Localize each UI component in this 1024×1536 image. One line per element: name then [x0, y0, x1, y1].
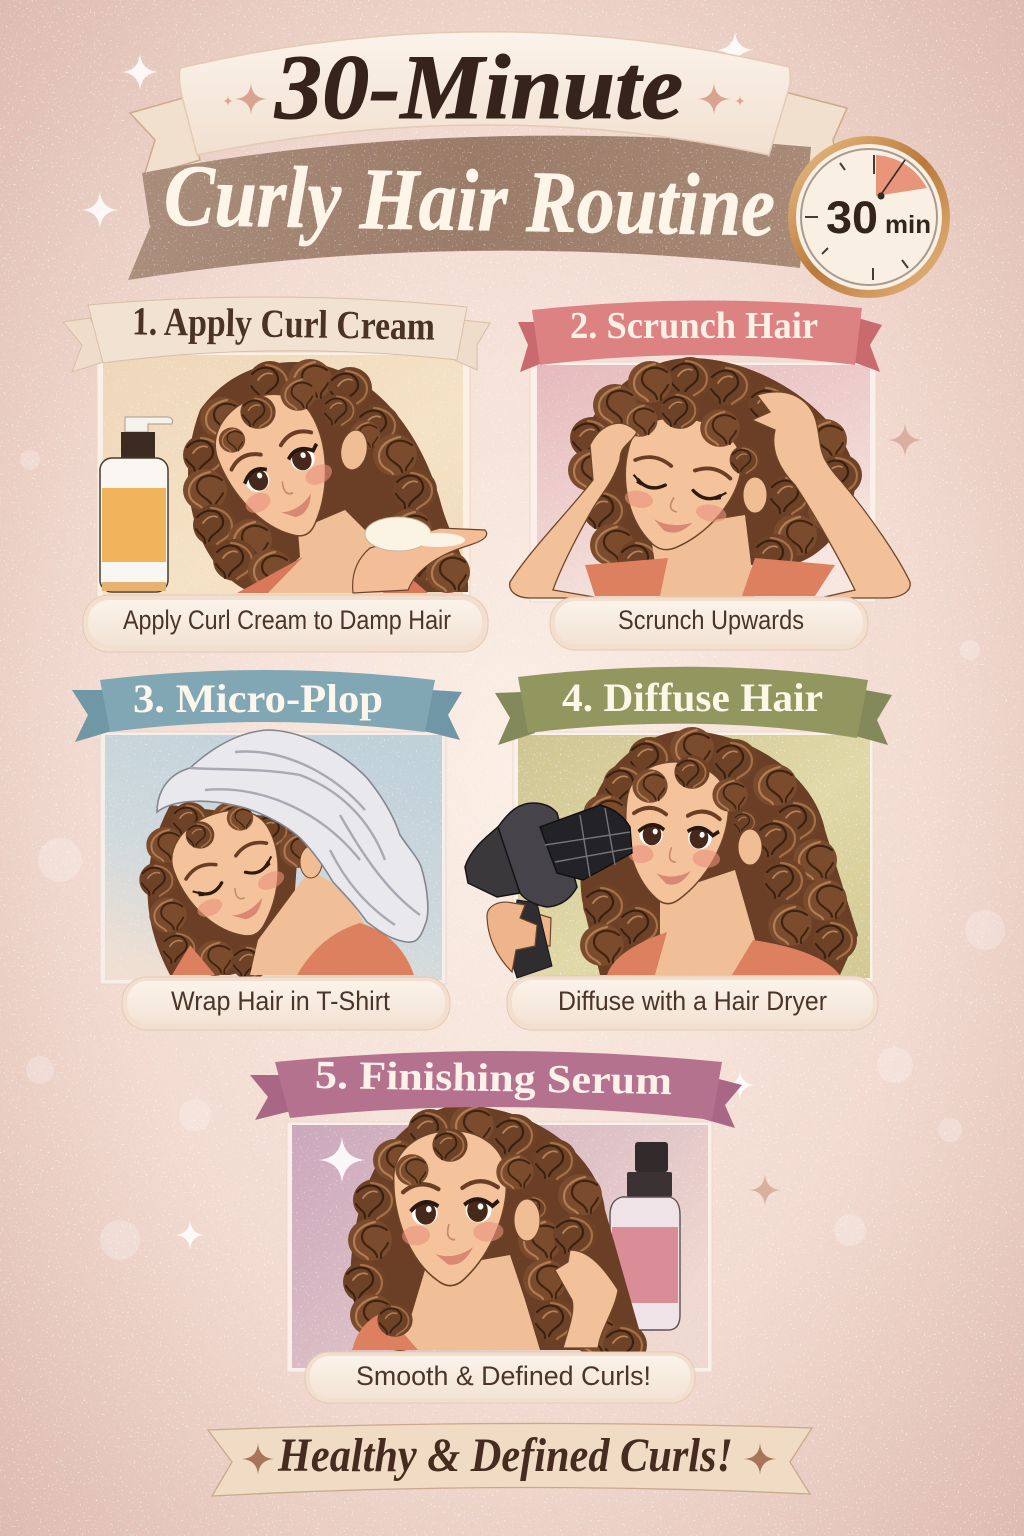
caption: step 3 [122, 977, 450, 1030]
towel [157, 730, 428, 942]
panel: step 1 apply curl cream [97, 352, 487, 602]
ribbon tails [130, 92, 847, 176]
panel: step 3 micro-plop [100, 730, 446, 984]
brown ribbon [128, 136, 811, 280]
character: woman scrunching hair [510, 357, 910, 598]
ear [338, 428, 370, 472]
footer text: Healthy & Defined Curls! [277, 1429, 733, 1482]
panel: step 2 scrunch hair [510, 357, 910, 602]
caption: step 2: Scrunch Upwards [618, 605, 804, 635]
character: woman diffusing hair [580, 727, 858, 975]
panel: step 4 diffuse hair [465, 727, 873, 982]
icon: 30 minute timer: min [885, 211, 931, 239]
ribbon: step 2 heading [518, 300, 882, 372]
neck and shirt [250, 870, 365, 975]
hand [555, 1250, 618, 1348]
neck and shirt [650, 515, 755, 597]
caption: step 1 [83, 595, 488, 652]
title banner [120, 32, 847, 285]
ribbon: step 2 heading: 2. Scrunch Hair [570, 305, 818, 347]
neck and shirt [395, 1255, 540, 1350]
ear [743, 477, 767, 513]
ribbon: step 3 heading: 3. Micro-Plop [133, 676, 383, 721]
cream ribbon [179, 32, 790, 155]
caption: step 2 [550, 597, 868, 650]
ribbon: step 5 heading [250, 1051, 742, 1128]
character: woman with shiny curls [343, 1104, 647, 1366]
ear [300, 846, 322, 878]
ribbon tails [72, 690, 462, 742]
icon: 30 minute timer [788, 136, 950, 298]
arms and hands [510, 392, 910, 598]
character: woman with curly hair [183, 359, 487, 593]
icon: 30 minute timer: 30 [826, 192, 878, 243]
ribbon: step 1 heading [63, 297, 490, 372]
caption: step 4: Diffuse with a Hair Dryer [558, 986, 827, 1016]
caption: step 5: Smooth & Defined Curls! [356, 1361, 651, 1391]
neck and shirt [262, 510, 405, 593]
caption: step 4 [507, 976, 878, 1030]
caption: step 3: Wrap Hair in T-Shirt [171, 986, 390, 1016]
sparkle in panel 5 [318, 1136, 366, 1184]
icon: hair dryer with diffuser [465, 803, 632, 978]
hand on handle [487, 902, 537, 972]
heading: Curly Hair Routine: Curly Hair Routine [163, 148, 776, 255]
hand with cream [353, 517, 487, 593]
ribbon: step 1 heading: 1. Apply Curl Cream [132, 298, 435, 349]
title sparkles [223, 83, 745, 115]
caption: step 1: Apply Curl Cream to Damp Hair [123, 605, 451, 635]
ear [738, 829, 762, 865]
icon: serum bottle [610, 1142, 680, 1330]
footer ribbon [208, 1423, 812, 1496]
ribbon tails [250, 1075, 742, 1128]
footer sparkles [242, 1443, 776, 1475]
character: woman with towel wrap [139, 730, 428, 980]
caption: step 5 [305, 1352, 695, 1403]
ribbon tails [518, 318, 882, 372]
ribbon tails [495, 690, 892, 745]
ribbon tails [63, 318, 490, 372]
ear [514, 1199, 540, 1241]
ribbon: step 3 heading [72, 670, 462, 742]
icon: curl cream bottle [100, 417, 172, 592]
ribbon: step 5 heading: 5. Finishing Serum [315, 1052, 672, 1103]
panel: step 5 finishing serum [287, 1104, 712, 1372]
ribbon: step 4 heading [495, 667, 892, 745]
ribbon: step 4 heading: 4. Diffuse Hair [562, 675, 823, 720]
neck and shirt [610, 870, 755, 975]
heading: 30-Minute: 30-Minute [274, 36, 683, 138]
